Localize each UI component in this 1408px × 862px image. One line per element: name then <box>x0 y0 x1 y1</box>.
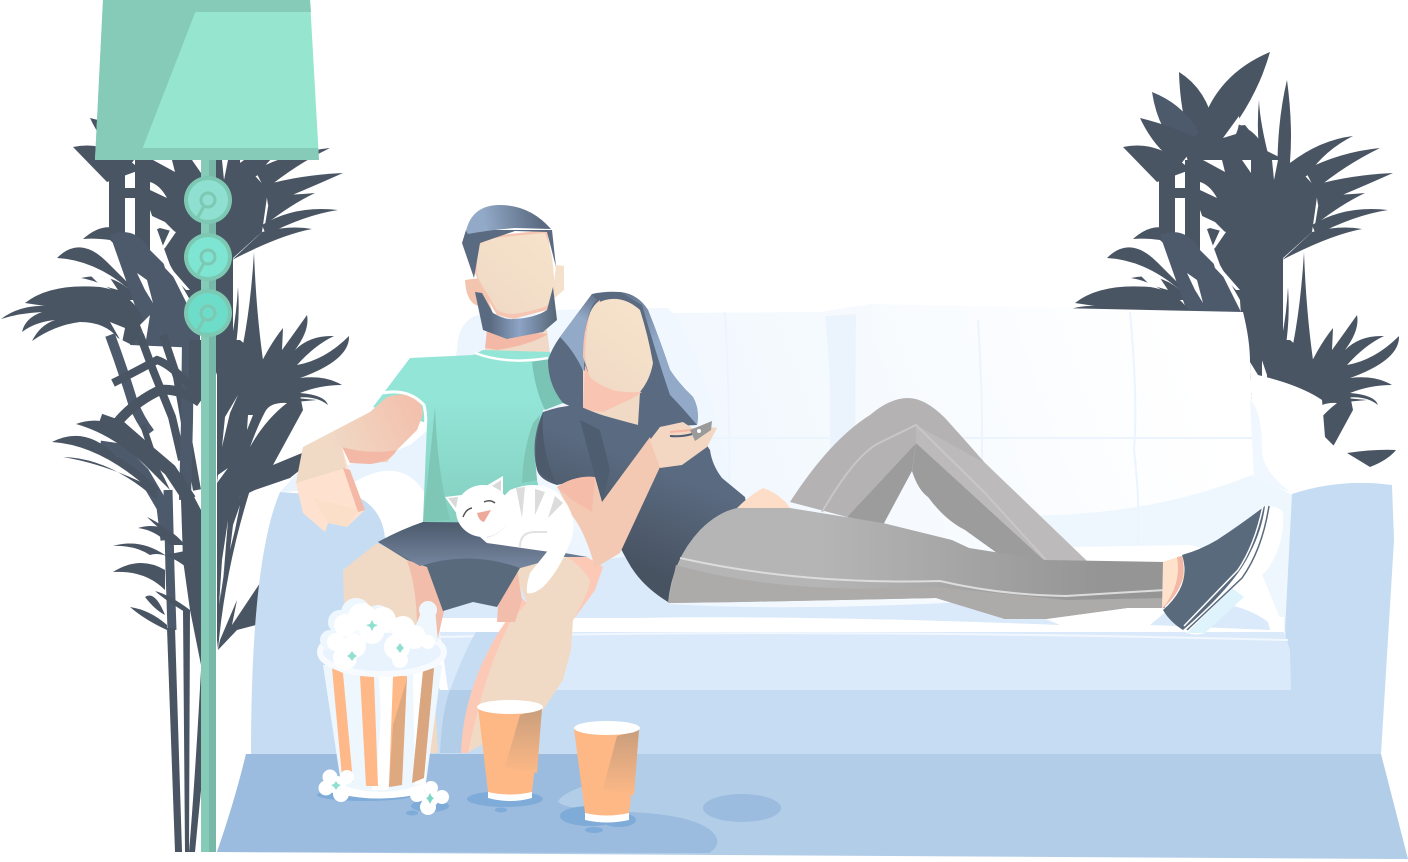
bucket body <box>323 665 442 799</box>
bucket rim <box>320 630 444 674</box>
popcorn pile <box>320 598 438 670</box>
sparkles <box>347 620 404 661</box>
loose popcorn left <box>318 770 354 802</box>
lamp shade <box>95 0 319 160</box>
back leg <box>790 398 1088 562</box>
cat stripes <box>487 487 563 547</box>
front leg <box>668 508 1165 619</box>
shoe <box>1163 506 1283 634</box>
cat <box>445 476 574 593</box>
man left leg <box>343 543 444 753</box>
popcorn bucket <box>317 598 449 816</box>
man <box>296 205 603 753</box>
woman face <box>583 299 653 392</box>
right plant <box>1072 52 1399 446</box>
lamp pole <box>201 160 216 852</box>
woman hand on knee <box>737 488 790 508</box>
cup left <box>467 700 543 812</box>
cat tail <box>527 540 571 593</box>
woman neck <box>583 365 642 425</box>
woman <box>535 292 748 602</box>
ankle <box>1162 556 1186 609</box>
man neck <box>485 328 550 354</box>
sofa base and arms <box>251 430 1394 754</box>
man hand <box>296 447 365 532</box>
man face <box>475 230 555 319</box>
floor lamp <box>95 0 319 852</box>
man hair <box>462 205 556 278</box>
loose popcorn right <box>406 781 449 816</box>
cat face <box>463 501 495 522</box>
woman top <box>535 405 748 602</box>
right plant cut-out leaf <box>1347 450 1396 467</box>
sofa back <box>400 304 1400 640</box>
man ears <box>465 265 564 310</box>
lamp beads <box>184 176 232 337</box>
cup right <box>560 721 640 833</box>
man arm <box>303 392 426 464</box>
left plant <box>1 52 349 852</box>
cat body <box>479 485 574 552</box>
man beard <box>475 287 557 339</box>
man right leg <box>461 557 603 753</box>
woman arm <box>557 437 660 568</box>
cat head <box>456 485 510 537</box>
cat ears <box>445 476 503 514</box>
man shorts <box>378 518 587 611</box>
floor <box>217 754 1408 859</box>
woman legs <box>668 398 1283 634</box>
woman hair <box>548 292 698 428</box>
man t-shirt <box>373 350 563 523</box>
bucket shadow <box>317 789 413 801</box>
woman hand and phone <box>650 421 717 468</box>
